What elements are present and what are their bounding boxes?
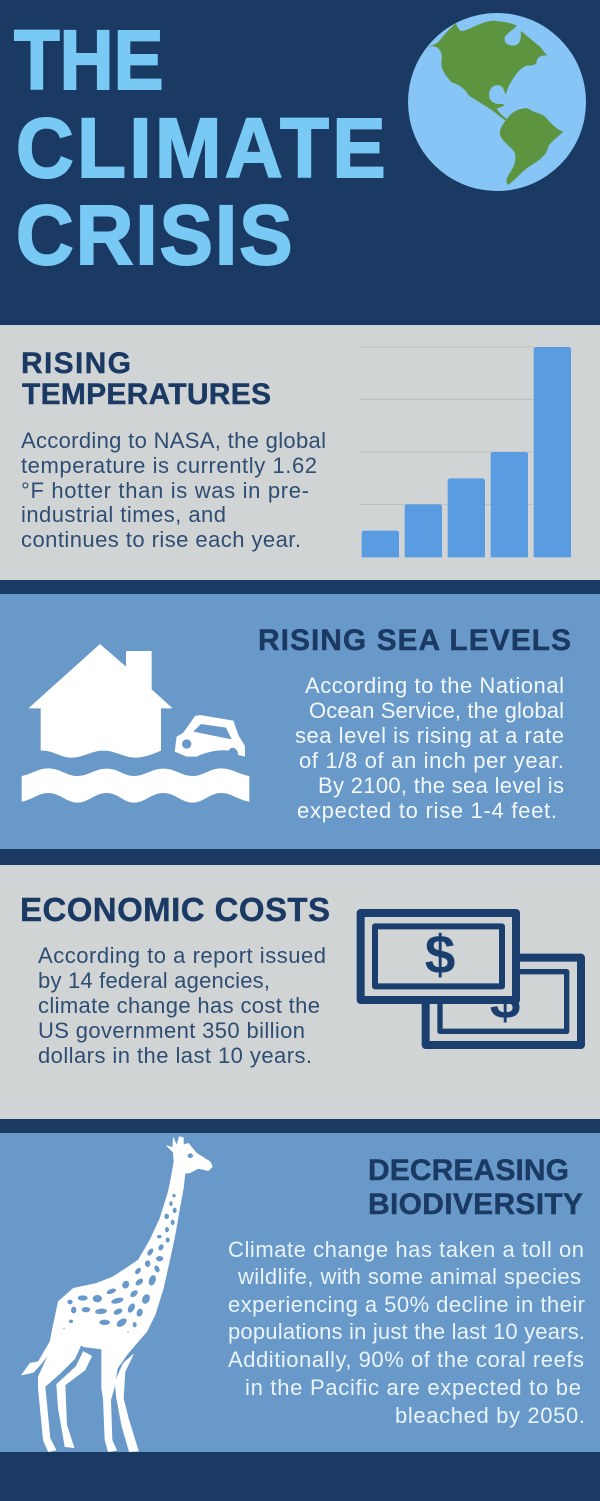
icon: dollar bills	[361, 913, 581, 1045]
heading: rising temperatures: TEMPERATURES	[22, 378, 271, 411]
heading: rising temperatures	[21, 347, 271, 411]
panel: decreasing biodiversity	[0, 1133, 600, 1452]
text: biodiversity description: populations in just the last 10 years.	[228, 1319, 585, 1344]
title	[14, 13, 386, 282]
text: sea level description	[295, 673, 564, 823]
text: temperature description: According to NASA, the global	[21, 428, 326, 453]
text: sea level description: By 2100, the sea level is	[318, 773, 564, 798]
text: sea level description: Ocean Service, the global	[309, 698, 564, 723]
text: biodiversity description: bleached by 2050.	[395, 1403, 585, 1428]
heading: economic costs: ECONOMIC COSTS	[20, 891, 330, 928]
panel: rising sea levels	[0, 594, 600, 849]
text: temperature description	[21, 428, 326, 552]
icon: giraffe	[22, 1137, 212, 1452]
text: biodiversity description: experiencing a 50% decline in their	[228, 1292, 585, 1317]
text: temperature description: industrial times, and	[21, 502, 226, 527]
text: temperature description: temperature is currently 1.62	[21, 453, 317, 478]
text: temperature description: continues to rise each year.	[21, 527, 301, 552]
text: biodiversity description: Additionally, 90% of the coral reefs	[228, 1347, 584, 1372]
text: economic description	[38, 943, 326, 1068]
heading: decreasing biodiversity	[368, 1154, 583, 1221]
title: CRISIS	[16, 189, 292, 282]
icon: dollar bills: $	[425, 923, 455, 985]
icon: dollar bills: $	[490, 968, 520, 1030]
text: biodiversity description: in the Pacific are expected to be	[245, 1375, 581, 1400]
panel: rising temperatures	[0, 325, 600, 580]
text: biodiversity description	[228, 1237, 585, 1428]
text: sea level description: According to the National	[305, 673, 564, 698]
title: THE	[14, 13, 164, 107]
heading: rising temperatures: RISING	[21, 347, 131, 380]
heading: decreasing biodiversity: BIODIVERSITY	[368, 1188, 583, 1221]
text: economic description: dollars in the last 10 years.	[38, 1043, 312, 1068]
text: sea level description: sea level is rising at a rate	[295, 723, 564, 748]
text: biodiversity description: wildlife, with some animal species	[237, 1264, 581, 1289]
bar chart: rising temperatures	[360, 347, 571, 557]
heading: rising sea levels: RISING SEA LEVELS	[258, 624, 571, 657]
text: temperature description: °F hotter than is was in pre-	[21, 478, 309, 503]
text: economic description: US government 350 billion	[38, 1018, 305, 1043]
text: sea level description: expected to rise 1-4 feet.	[297, 798, 557, 823]
icon: globe	[408, 13, 586, 191]
text: economic description: According to a report issued	[38, 943, 326, 968]
panel: economic costs	[0, 865, 600, 1119]
text: economic description: by 14 federal agencies,	[38, 968, 270, 993]
icon: flooded house and car	[22, 644, 249, 803]
text: sea level description: of 1/8 of an inch per year.	[299, 748, 564, 773]
text: biodiversity description: Climate change has taken a toll on	[228, 1237, 584, 1262]
heading: decreasing biodiversity: DECREASING	[368, 1154, 569, 1187]
title: CLIMATE	[16, 102, 386, 195]
text: economic description: climate change has cost the	[38, 993, 320, 1018]
